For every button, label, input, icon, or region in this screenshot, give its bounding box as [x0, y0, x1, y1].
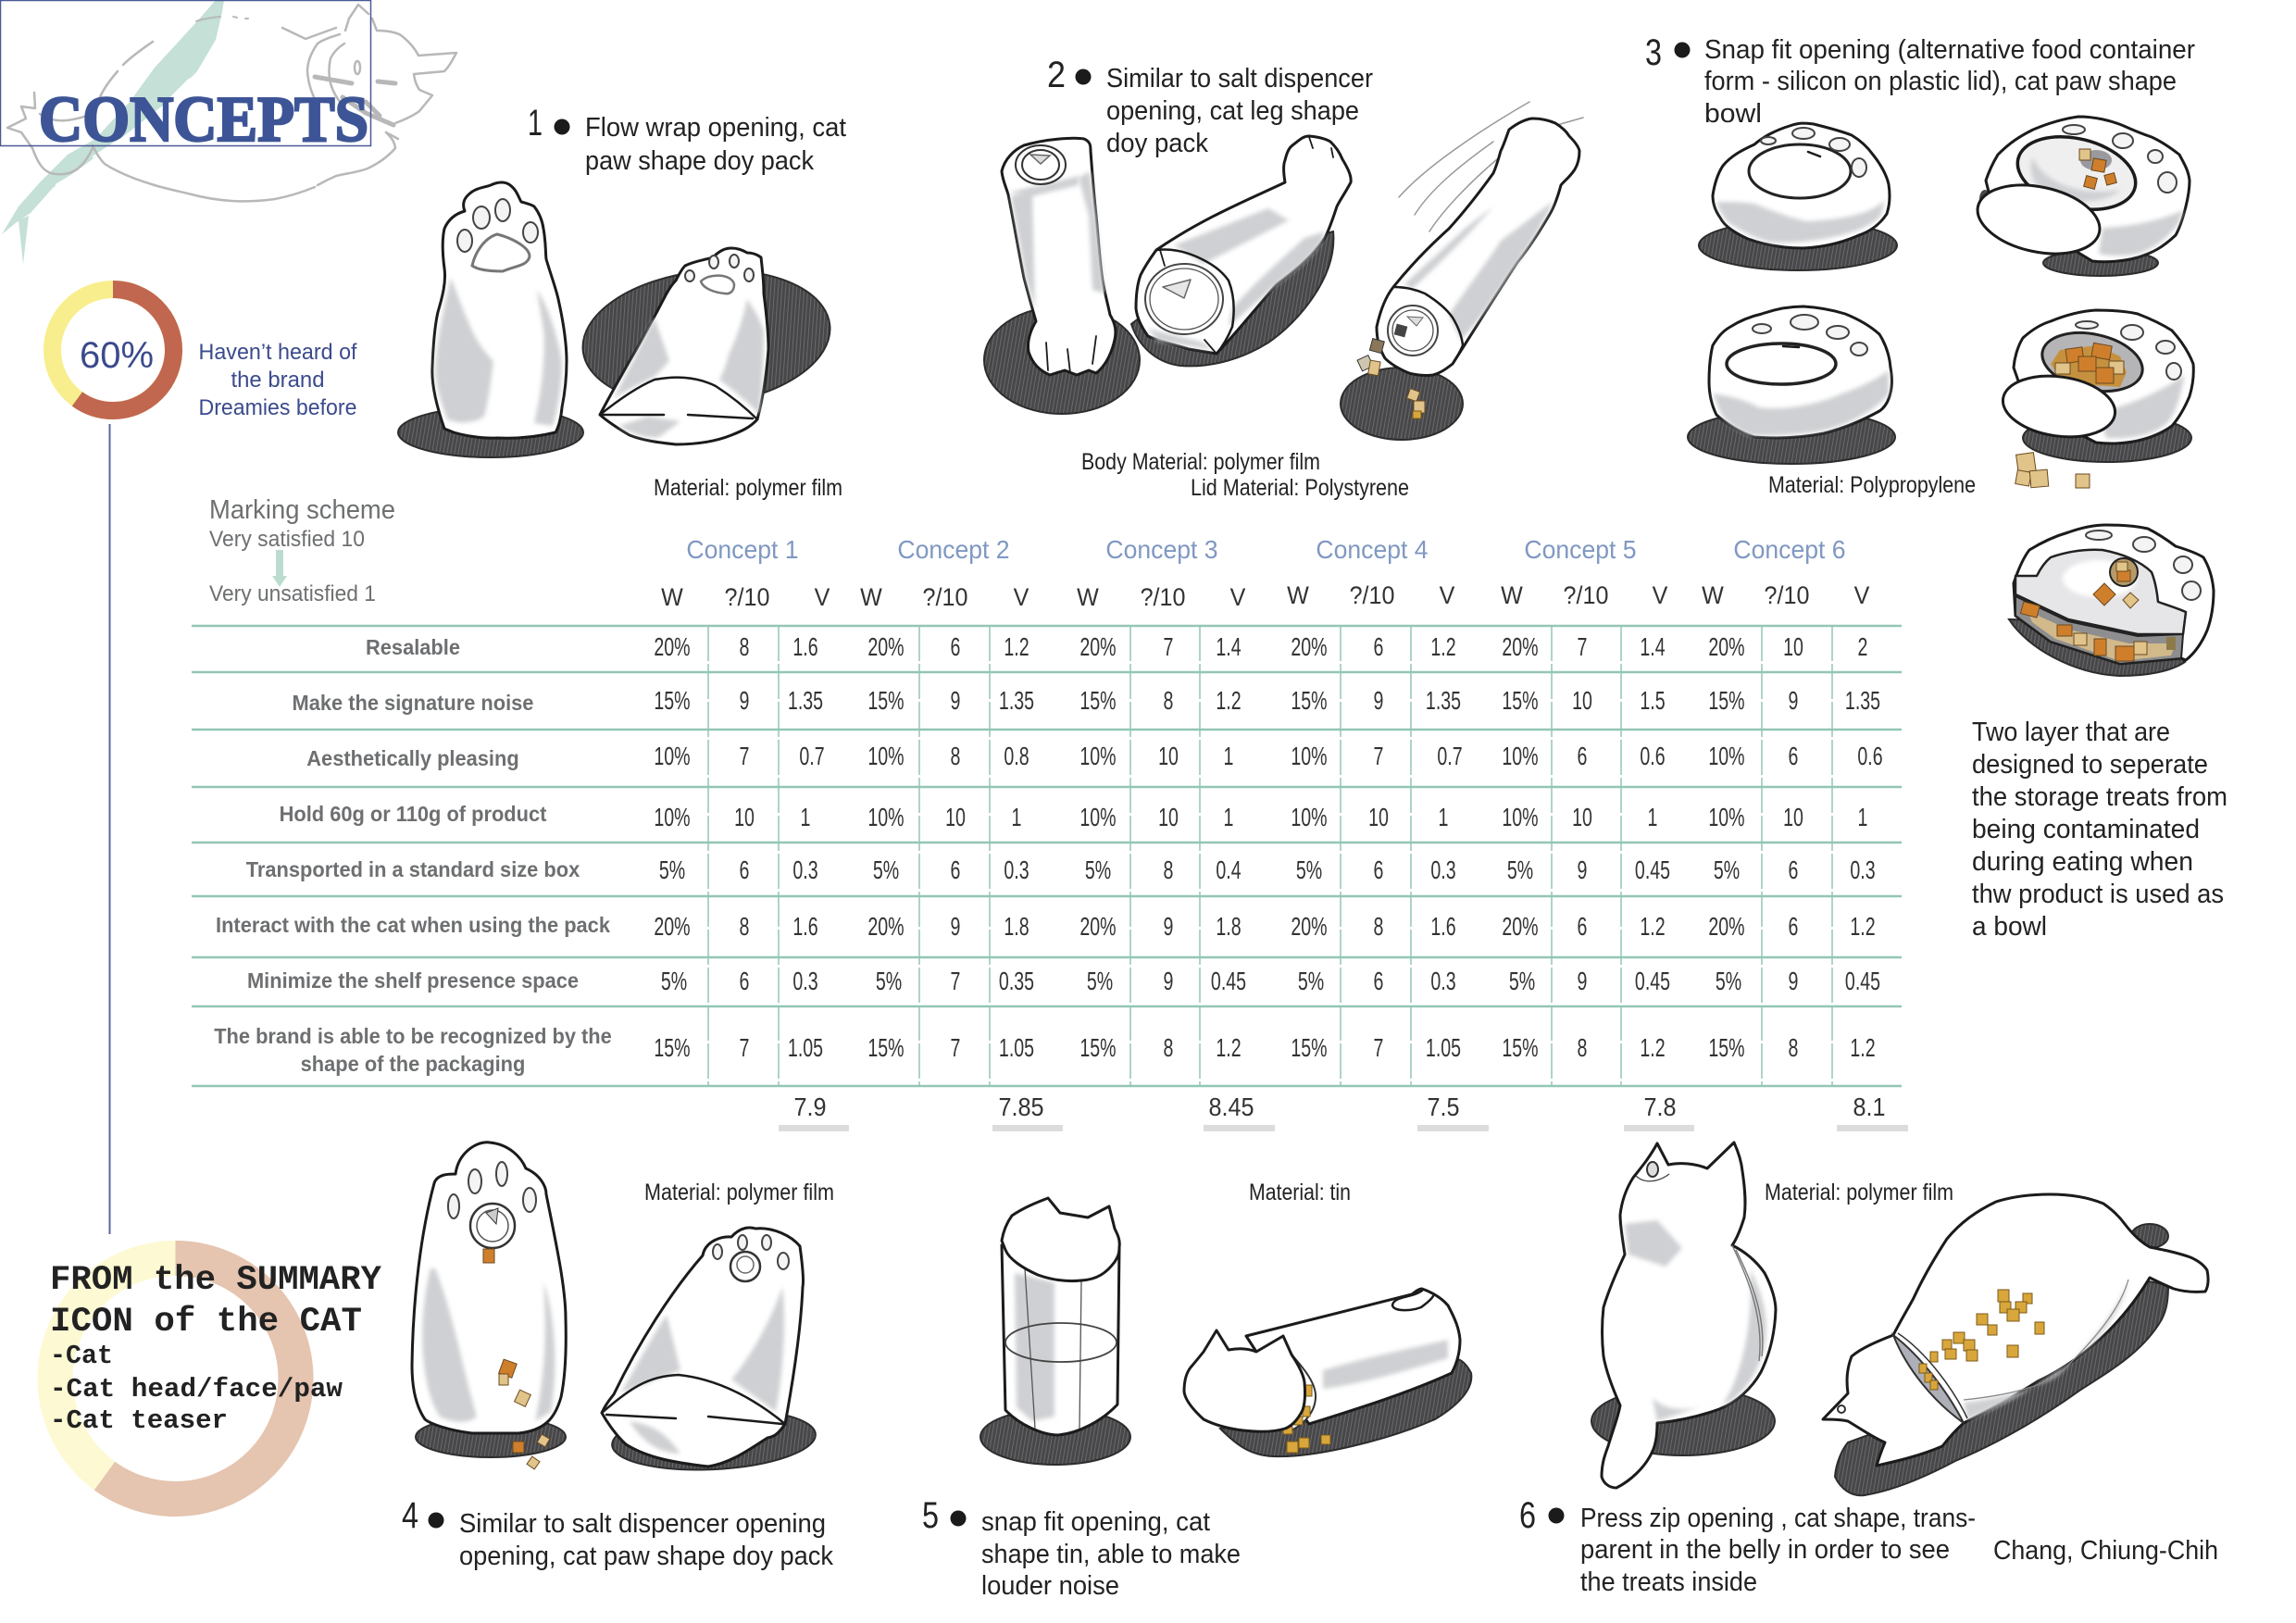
text: two layer explanation: during eating when — [1972, 847, 2193, 877]
row: transported in a standard size box: 0.3 — [1850, 856, 1876, 885]
row: resalable: 20% — [1079, 633, 1117, 662]
row: make the signature noise: 15% — [1502, 687, 1539, 716]
summary text: FROM the SUMMARY — [50, 1261, 382, 1300]
table column headings: concept names: Concept 4 — [1316, 534, 1429, 564]
row: interact with the cat when using the pack: 9 — [951, 913, 960, 942]
row: transported in a standard size box: 5% — [1085, 856, 1111, 885]
text: two layer explanation — [1972, 718, 2227, 942]
row: transported in a standard size box: 0.45 — [1635, 856, 1670, 885]
row: brand recognized by the shape of the packaging: 8 — [1578, 1034, 1587, 1063]
row: make the signature noise: 9 — [951, 687, 960, 716]
row: hold 60g or 110g of product: 1 — [1012, 804, 1021, 832]
row: minimize the shelf presence space: 6 — [740, 968, 749, 996]
text: two layer explanation: Two layer that are — [1972, 718, 2170, 747]
row: aesthetically pleasing: 0.7 — [799, 743, 825, 771]
donut: 60% brand awareness — [52, 289, 174, 411]
row: interact with the cat when using the pack: 20% — [1079, 913, 1117, 942]
concept 2 caption: 2 — [1047, 55, 1066, 95]
row: resalable: 1.2 — [1430, 633, 1456, 662]
row: transported in a standard size box: 5% — [1507, 856, 1533, 885]
row: resalable: 20% — [1708, 633, 1745, 662]
concept 3 caption: bowl — [1704, 99, 1762, 129]
row: aesthetically pleasing: 7 — [740, 743, 749, 771]
row: hold 60g or 110g of product: 10% — [1079, 804, 1117, 832]
row: hold 60g or 110g of product — [280, 802, 1867, 832]
row: aesthetically pleasing: 10% — [654, 743, 691, 771]
summary text: ICON of the CAT — [50, 1303, 362, 1342]
row: aesthetically pleasing: 10% — [1502, 743, 1539, 771]
row: brand recognized by the shape of the packaging: 15% — [1708, 1034, 1745, 1063]
row: hold 60g or 110g of product: 10 — [1368, 804, 1389, 832]
row: aesthetically pleasing: Aesthetically pleasing — [306, 746, 519, 770]
row: interact with the cat when using the pack: 1.2 — [1640, 913, 1666, 942]
table sub headings: weight, score, value: V — [815, 582, 830, 611]
row: minimize the shelf presence space: 9 — [1164, 968, 1173, 996]
row: aesthetically pleasing: 7 — [1374, 743, 1383, 771]
row: aesthetically pleasing: 0.6 — [1857, 743, 1883, 771]
concept 4 caption: 4 — [402, 1495, 418, 1536]
row: minimize the shelf presence space: Minimize the shelf presence space — [247, 968, 579, 993]
row: concept totals: 7.8 — [1643, 1092, 1677, 1121]
row: aesthetically pleasing: 8 — [951, 743, 960, 771]
concept 2 materials — [1081, 449, 1409, 501]
table sub headings: weight, score, value: W — [1702, 581, 1724, 609]
illustration: concept 3 bowl closed, second view — [1688, 306, 1895, 464]
row: brand recognized by the shape of the packaging: 7 — [1374, 1034, 1383, 1063]
row: transported in a standard size box: 9 — [1578, 856, 1587, 885]
row: resalable: Resalable — [366, 635, 460, 659]
row: aesthetically pleasing: 1 — [1224, 743, 1233, 771]
row: interact with the cat when using the pack: 9 — [1164, 913, 1173, 942]
concept 3 material: Material: Polypropylene — [1768, 472, 1976, 498]
concept 4 caption: opening, cat paw shape doy pack — [459, 1542, 833, 1571]
row: make the signature noise: 1.35 — [788, 687, 823, 716]
row: interact with the cat when using the pack: 20% — [1502, 913, 1539, 942]
text: two layer explanation: a bowl — [1972, 912, 2047, 942]
row: resalable: 6 — [1374, 633, 1383, 662]
row: aesthetically pleasing — [306, 743, 1883, 771]
table grid lines — [192, 626, 1902, 1086]
connector line between donuts — [109, 424, 111, 1234]
table column headings: concept names: Concept 2 — [897, 534, 1010, 564]
row: hold 60g or 110g of product: 10% — [1502, 804, 1539, 832]
row: interact with the cat when using the pack: 8 — [1374, 913, 1383, 942]
row: hold 60g or 110g of product: 10 — [1783, 804, 1803, 832]
row: hold 60g or 110g of product: 1 — [1858, 804, 1867, 832]
illustration: concept 3 two layer bowl — [2009, 525, 2214, 676]
row: resalable: 20% — [1291, 633, 1328, 662]
concept 4 caption — [402, 1495, 833, 1571]
row: make the signature noise: 10 — [1572, 687, 1592, 716]
concept 1 caption: 1 — [528, 103, 543, 144]
row: brand recognized by the shape of the packaging: 1.05 — [999, 1034, 1034, 1063]
concept 5 caption: snap fit opening, cat — [981, 1507, 1210, 1537]
row: transported in a standard size box: 0.3 — [1430, 856, 1456, 885]
row: brand recognized by the shape of the packaging: 8 — [1789, 1034, 1798, 1063]
row: interact with the cat when using the pack: 6 — [1578, 913, 1587, 942]
cat line drawing behind title — [7, 5, 456, 201]
row: interact with the cat when using the pack: Interact with the cat when using the pack — [216, 913, 611, 937]
row: make the signature noise: 15% — [1079, 687, 1117, 716]
row: resalable: 20% — [1502, 633, 1539, 662]
table sub headings: weight, score, value: V — [1230, 582, 1246, 611]
donut: summary — [56, 1258, 296, 1499]
row: aesthetically pleasing: 10% — [1708, 743, 1745, 771]
concept 5 caption: shape tin, able to make — [981, 1540, 1241, 1569]
row: aesthetically pleasing: 10% — [1291, 743, 1328, 771]
row: minimize the shelf presence space: 5% — [661, 968, 687, 996]
row: transported in a standard size box: 5% — [1714, 856, 1740, 885]
row: resalable: 10 — [1783, 633, 1803, 662]
row: brand recognized by the shape of the packaging: 1.05 — [1426, 1034, 1461, 1063]
row: resalable: 7 — [1578, 633, 1587, 662]
row: hold 60g or 110g of product: 10% — [654, 804, 691, 832]
donut: 60% brand awareness: 60% — [80, 335, 154, 376]
table sub headings: weight, score, value: W — [661, 582, 683, 611]
row: brand recognized by the shape of the packaging: 8 — [1164, 1034, 1173, 1063]
row: make the signature noise: 15% — [654, 687, 691, 716]
summary text: -Cat teaser — [50, 1405, 228, 1436]
row: hold 60g or 110g of product: 10 — [945, 804, 966, 832]
row: make the signature noise: 1.35 — [999, 687, 1034, 716]
concept 1 caption: Flow wrap opening, cat — [585, 113, 846, 143]
table sub headings: weight, score, value: ?/10 — [923, 582, 967, 611]
row: make the signature noise: 1.35 — [1426, 687, 1461, 716]
row: resalable: 1.4 — [1640, 633, 1666, 662]
illustration: concept 2 lying leg pack — [1131, 136, 1351, 366]
row: hold 60g or 110g of product: 10 — [1572, 804, 1592, 832]
concept 6 caption: the treats inside — [1580, 1567, 1757, 1597]
concept 3 caption — [1645, 32, 2195, 129]
row: brand recognized by the shape of the packaging: 1.2 — [1216, 1034, 1242, 1063]
row: make the signature noise: Make the signature noise — [293, 691, 533, 715]
summary text: -Cat — [50, 1341, 113, 1371]
illustration: concept 5 standing tin — [980, 1198, 1130, 1465]
table sub headings: weight, score, value — [661, 581, 1870, 611]
row: transported in a standard size box: 6 — [951, 856, 960, 885]
row: resalable: 8 — [740, 633, 749, 662]
row: interact with the cat when using the pack: 1.6 — [792, 913, 818, 942]
row: interact with the cat when using the pack: 1.8 — [1004, 913, 1029, 942]
concept 6 caption: parent in the belly in order to see — [1580, 1535, 1950, 1565]
concept 2 caption: Similar to salt dispencer — [1106, 64, 1373, 94]
concept 6 material: Material: polymer film — [1765, 1180, 1953, 1205]
marking scheme legend: Marking scheme — [209, 495, 395, 525]
brand awareness caption — [198, 340, 357, 420]
brand awareness caption: Dreamies before — [198, 395, 357, 420]
concept 1 material: Material: polymer film — [654, 475, 842, 501]
row: transported in a standard size box: Transported in a standard size box — [246, 857, 580, 881]
row: interact with the cat when using the pack: 1.2 — [1850, 913, 1876, 942]
row: minimize the shelf presence space: 9 — [1789, 968, 1798, 996]
concept 3 caption: form - silicon on plastic lid), cat paw shape — [1704, 67, 2177, 96]
concept 3 caption: 3 — [1645, 32, 1662, 73]
row: transported in a standard size box: 5% — [873, 856, 899, 885]
illustration: concept 2 pouring leg pack — [1341, 102, 1583, 440]
row: resalable — [366, 633, 1867, 662]
brand awareness caption: the brand — [231, 368, 324, 393]
row: make the signature noise: 9 — [1789, 687, 1798, 716]
row: transported in a standard size box: 5% — [659, 856, 685, 885]
row: concept totals: 7.85 — [998, 1092, 1044, 1121]
row: concept totals: 7.9 — [793, 1092, 827, 1121]
row: hold 60g or 110g of product: 1 — [1224, 804, 1233, 832]
illustration: concept 6 lying cat pack — [1823, 1194, 2208, 1495]
illustration: concept 3 bowl closed, first view — [1699, 123, 1897, 270]
row: hold 60g or 110g of product: 1 — [1439, 804, 1448, 832]
row: transported in a standard size box: 8 — [1164, 856, 1173, 885]
concept 3 spilled kibble — [2015, 453, 2090, 488]
table sub headings: weight, score, value: ?/10 — [1141, 582, 1185, 611]
concept scoring table — [192, 534, 1908, 1131]
table sub headings: weight, score, value: V — [1854, 581, 1870, 609]
row: make the signature noise: 15% — [1708, 687, 1745, 716]
row: minimize the shelf presence space: 5% — [1087, 968, 1113, 996]
illustration: concept 6 standing cat pack — [1591, 1142, 1776, 1488]
row: minimize the shelf presence space: 0.45 — [1635, 968, 1670, 996]
summary text: -Cat head/face/paw — [50, 1374, 343, 1405]
row: minimize the shelf presence space: 6 — [1374, 968, 1383, 996]
row: aesthetically pleasing: 6 — [1789, 743, 1798, 771]
row: transported in a standard size box: 5% — [1296, 856, 1322, 885]
brand awareness caption: Haven’t heard of — [198, 340, 357, 365]
row: minimize the shelf presence space: 7 — [951, 968, 960, 996]
row: brand recognized by the shape of the packaging: 1.2 — [1640, 1034, 1666, 1063]
row: brand recognized by the shape of the packaging: 15% — [1291, 1034, 1328, 1063]
row: brand recognized by the shape of the packaging: 15% — [654, 1034, 691, 1063]
row: make the signature noise: 15% — [867, 687, 905, 716]
illustration: concept 1 standing paw pack — [398, 182, 583, 457]
row: hold 60g or 110g of product: 10% — [1708, 804, 1745, 832]
table column headings: concept names — [686, 534, 1846, 564]
row: resalable: 1.4 — [1216, 633, 1242, 662]
row: interact with the cat when using the pack: 1.6 — [1430, 913, 1456, 942]
table sub headings: weight, score, value: ?/10 — [725, 582, 769, 611]
row: transported in a standard size box: 0.4 — [1216, 856, 1242, 885]
row: brand recognized by the shape of the packaging: The brand is able to be recognized by the — [214, 1024, 612, 1048]
row: brand recognized by the shape of the packaging: 7 — [740, 1034, 749, 1063]
table sub headings: weight, score, value: ?/10 — [1350, 581, 1394, 609]
row: make the signature noise: 8 — [1164, 687, 1173, 716]
row: hold 60g or 110g of product: Hold 60g or 110g of product — [280, 802, 547, 826]
illustration: concept 1 lying paw pack — [576, 248, 837, 444]
row: transported in a standard size box: 6 — [740, 856, 749, 885]
row: aesthetically pleasing: 0.6 — [1640, 743, 1666, 771]
concept 6 caption: Press zip opening , cat shape, trans- — [1580, 1504, 1976, 1533]
decorative mint brush stroke — [2, 0, 224, 264]
row: aesthetically pleasing: 10 — [1158, 743, 1179, 771]
table sub headings: weight, score, value: W — [1077, 582, 1099, 611]
row: hold 60g or 110g of product: 1 — [801, 804, 810, 832]
concept 4 caption: Similar to salt dispencer opening — [459, 1509, 826, 1539]
row: interact with the cat when using the pack: 20% — [1708, 913, 1745, 942]
row: minimize the shelf presence space: 0.3 — [1430, 968, 1456, 996]
row: resalable: 20% — [867, 633, 905, 662]
text: two layer explanation: being contaminated — [1972, 815, 2200, 844]
table sub headings: weight, score, value: V — [1440, 581, 1455, 609]
row: transported in a standard size box: 0.3 — [1004, 856, 1029, 885]
concept 2 materials: Body Material: polymer film — [1081, 449, 1320, 475]
author credit: Chang, Chiung-Chih — [1993, 1536, 2218, 1566]
row: hold 60g or 110g of product: 1 — [1648, 804, 1657, 832]
text: two layer explanation: thw product is used as — [1972, 880, 2224, 909]
concept 3 caption: Snap fit opening (alternative food container — [1704, 35, 2195, 65]
table sub headings: weight, score, value: W — [860, 582, 882, 611]
row: resalable: 7 — [1164, 633, 1173, 662]
row: transported in a standard size box — [246, 856, 1876, 885]
row: hold 60g or 110g of product: 10 — [734, 804, 755, 832]
row: aesthetically pleasing: 10% — [1079, 743, 1117, 771]
row: transported in a standard size box: 6 — [1789, 856, 1798, 885]
row: resalable: 20% — [654, 633, 691, 662]
concept 2 caption: opening, cat leg shape — [1106, 96, 1359, 126]
table sub headings: weight, score, value: V — [1653, 581, 1668, 609]
row: hold 60g or 110g of product: 10% — [867, 804, 905, 832]
concept 5 caption: louder noise — [981, 1571, 1119, 1601]
row: interact with the cat when using the pack: 8 — [740, 913, 749, 942]
row: resalable: 1.2 — [1004, 633, 1029, 662]
row: minimize the shelf presence space: 5% — [1716, 968, 1741, 996]
row: concept totals: 8.1 — [1853, 1092, 1886, 1121]
table sub headings: weight, score, value: V — [1014, 582, 1029, 611]
concept 5 caption — [922, 1495, 1241, 1601]
row: make the signature noise: 9 — [1374, 687, 1383, 716]
row: concept totals — [779, 1092, 1908, 1131]
row: brand recognized by the shape of the packaging: 7 — [951, 1034, 960, 1063]
table sub headings: weight, score, value: W — [1501, 581, 1523, 609]
table column headings: concept names: Concept 6 — [1733, 534, 1846, 564]
row: minimize the shelf presence space: 0.3 — [792, 968, 818, 996]
row: minimize the shelf presence space: 0.35 — [999, 968, 1034, 996]
row: concept totals: 8.45 — [1208, 1092, 1254, 1121]
concept 1 caption — [528, 103, 846, 176]
concept 1 caption: paw shape doy pack — [585, 146, 814, 176]
illustration: concept 4 lying paw pack — [602, 1228, 817, 1475]
concept 5 caption: 5 — [922, 1495, 939, 1536]
row: minimize the shelf presence space: 5% — [1298, 968, 1324, 996]
row: resalable: 1.6 — [792, 633, 818, 662]
row: make the signature noise: 9 — [740, 687, 749, 716]
illustration: concept 4 standing paw pack — [412, 1142, 566, 1469]
concept 6 caption — [1519, 1495, 1976, 1597]
marking scheme legend — [209, 495, 395, 606]
row: make the signature noise — [293, 687, 1880, 716]
row: resalable: 2 — [1858, 633, 1867, 662]
text: two layer explanation: the storage treats from — [1972, 782, 2227, 812]
row: interact with the cat when using the pack: 20% — [867, 913, 905, 942]
concept 2 materials: Lid Material: Polystyrene — [1191, 475, 1409, 501]
row: brand recognized by the shape of the packaging: 15% — [1079, 1034, 1117, 1063]
row: minimize the shelf presence space: 5% — [1509, 968, 1535, 996]
row: minimize the shelf presence space: 9 — [1578, 968, 1587, 996]
illustration: concept 3 bowl open full of kibble — [1999, 310, 2193, 462]
table column headings: concept names: Concept 3 — [1105, 534, 1218, 564]
row: interact with the cat when using the pack: 6 — [1789, 913, 1798, 942]
table column headings: concept names: Concept 5 — [1524, 534, 1637, 564]
row: transported in a standard size box: 6 — [1374, 856, 1383, 885]
row: transported in a standard size box: 0.3 — [792, 856, 818, 885]
table sub headings: weight, score, value: ?/10 — [1765, 581, 1809, 609]
concept 4 material: Material: polymer film — [644, 1180, 834, 1205]
text: two layer explanation: designed to seperate — [1972, 750, 2208, 780]
row: minimize the shelf presence space: 0.45 — [1211, 968, 1246, 996]
row: interact with the cat when using the pack: 20% — [1291, 913, 1328, 942]
row: concept totals: 7.5 — [1427, 1092, 1460, 1121]
row: hold 60g or 110g of product: 10 — [1158, 804, 1179, 832]
concept 5 material: Material: tin — [1249, 1180, 1351, 1205]
row: minimize the shelf presence space — [247, 968, 1880, 996]
illustration: concept 5 lying tin — [1184, 1289, 1471, 1456]
row: brand recognized by the shape of the packaging: 15% — [867, 1034, 905, 1063]
row: aesthetically pleasing: 6 — [1578, 743, 1587, 771]
row: make the signature noise: 15% — [1291, 687, 1328, 716]
marking scheme legend: Very unsatisfied 1 — [209, 581, 376, 606]
summary text — [50, 1261, 382, 1436]
row: aesthetically pleasing: 10% — [867, 743, 905, 771]
row: minimize the shelf presence space: 0.45 — [1845, 968, 1880, 996]
concept 6 caption: 6 — [1519, 1495, 1536, 1536]
row: interact with the cat when using the pack: 20% — [654, 913, 691, 942]
table sub headings: weight, score, value: ?/10 — [1564, 581, 1608, 609]
row: resalable: 6 — [951, 633, 960, 662]
row: brand recognized by the shape of the packaging — [214, 1024, 1876, 1076]
row: make the signature noise: 1.5 — [1640, 687, 1666, 716]
concept 2 caption: doy pack — [1106, 129, 1208, 158]
row: make the signature noise: 1.35 — [1845, 687, 1880, 716]
row: hold 60g or 110g of product: 10% — [1291, 804, 1328, 832]
illustration: concept 3 bowl open with kibble, first view — [1971, 117, 2190, 276]
table sub headings: weight, score, value: W — [1287, 581, 1309, 609]
title box — [0, 0, 370, 146]
row: interact with the cat when using the pack: 1.8 — [1216, 913, 1242, 942]
row: brand recognized by the shape of the packaging: 1.2 — [1850, 1034, 1876, 1063]
title: CONCEPTS — [39, 84, 368, 156]
row: brand recognized by the shape of the packaging: 1.05 — [788, 1034, 823, 1063]
row: brand recognized by the shape of the packaging: 15% — [1502, 1034, 1539, 1063]
row: aesthetically pleasing: 0.7 — [1437, 743, 1463, 771]
row: minimize the shelf presence space: 5% — [876, 968, 902, 996]
row: brand recognized by the shape of the packaging: shape of the packaging — [301, 1052, 525, 1076]
row: interact with the cat when using the pack — [216, 913, 1876, 942]
marking scheme legend: Very satisfied 10 — [209, 527, 365, 552]
row: aesthetically pleasing: 0.8 — [1004, 743, 1029, 771]
table column headings: concept names: Concept 1 — [686, 534, 799, 564]
concept 2 caption — [1047, 55, 1373, 158]
row: make the signature noise: 1.2 — [1216, 687, 1242, 716]
illustration: concept 2 standing leg pack — [984, 138, 1140, 414]
